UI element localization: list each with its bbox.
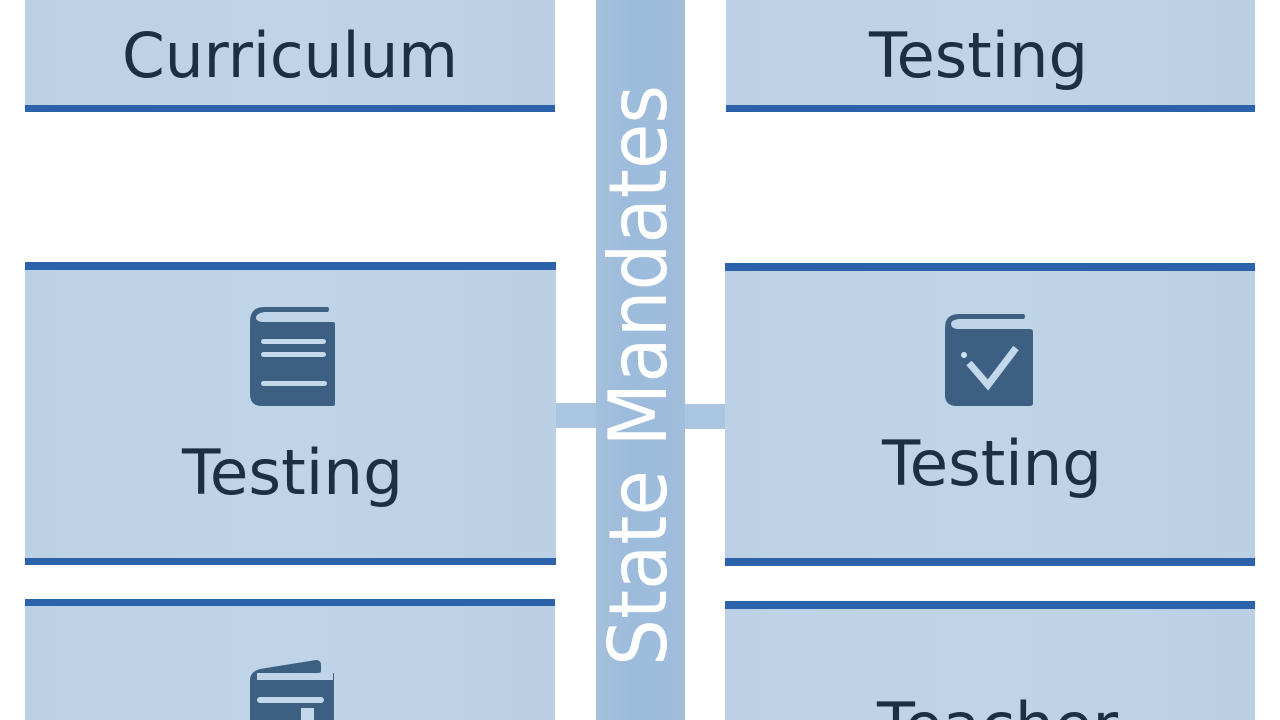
connector: left bbox=[555, 403, 597, 428]
panel: Testing with book icon (middle left) bbox=[25, 262, 556, 565]
panel: Curriculum (top left) bbox=[25, 0, 555, 112]
panel: Teacher (bottom right) bbox=[725, 601, 1255, 720]
icon: open book bbox=[250, 660, 334, 720]
icon: book with check mark bbox=[945, 314, 1033, 406]
heading: Testing: Testing bbox=[868, 19, 1088, 92]
heading: Curriculum: Curriculum bbox=[122, 19, 458, 92]
heading: Testing: Testing bbox=[881, 427, 1102, 500]
panel: Testing (top right) bbox=[726, 0, 1255, 112]
heading: Testing: Testing bbox=[181, 436, 403, 509]
central bar label: State Mandates bbox=[592, 85, 685, 666]
panel: Testing with check icon (middle right) bbox=[725, 263, 1255, 566]
panel: bottom left with book icon bbox=[25, 599, 555, 720]
central bar: State Mandates bbox=[592, 0, 685, 720]
icon: book with lines bbox=[250, 307, 335, 406]
connector: right bbox=[683, 404, 725, 429]
